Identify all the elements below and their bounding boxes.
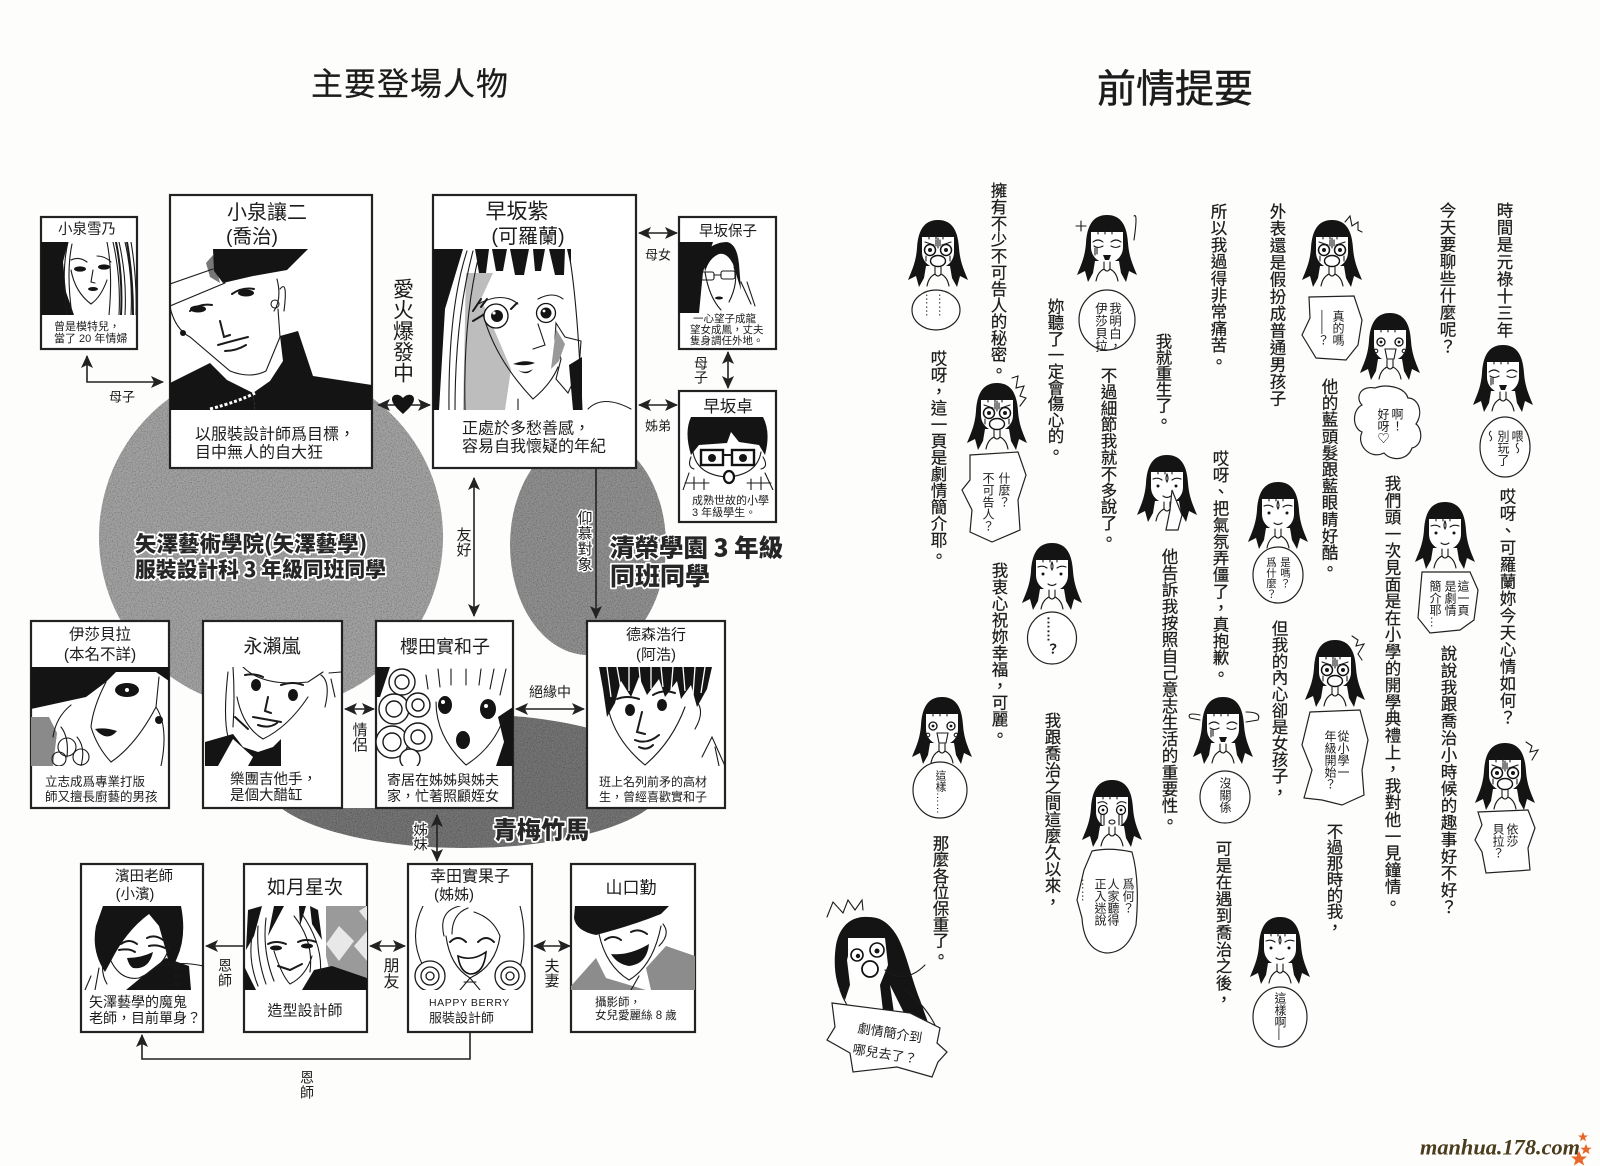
story text columns: 妳聽了一定會傷心的。 — [1045, 298, 1064, 460]
panel: Suguru Hayasaka — [679, 391, 776, 522]
title: story so far: 前情提要 — [1097, 68, 1253, 112]
caption — [692, 493, 769, 519]
bubble text: 我明白， — [1107, 302, 1121, 352]
name: 櫻田實和子 — [400, 637, 490, 657]
caption — [45, 774, 158, 804]
relation label: 母子 — [693, 356, 709, 384]
bubble text: 別玩了 — [1496, 430, 1510, 466]
caption: 正處於多愁善感， — [462, 418, 590, 438]
relation label: 夫妻 — [542, 958, 560, 988]
chibi: happy girl with cloud bubble — [1354, 313, 1421, 459]
name: 小泉雪乃 — [58, 221, 116, 238]
icon: stars — [1571, 1132, 1592, 1166]
relation label: 恩師 — [299, 1070, 315, 1100]
long hair — [835, 917, 930, 1028]
chibi: puzzled girl — [1022, 543, 1082, 664]
bubble text: 爲何？ — [1121, 878, 1135, 914]
bubble text: 不可告人？ — [981, 472, 995, 532]
story text columns: 哎呀，這一頁是劇情簡介耶。 — [928, 350, 947, 564]
story text columns: 但我的內心卻是女孩子， — [1269, 620, 1288, 800]
name: 山口勤 — [606, 878, 656, 898]
arrow: mentor (Kisaragi to Hamada) — [206, 946, 244, 988]
chibi: what? — [962, 376, 1027, 542]
arrow: friends (Kisaragi and Mikako) — [370, 946, 405, 989]
caption — [595, 995, 677, 1022]
bubble text — [1376, 408, 1404, 444]
bubble text: 喂～ — [1510, 430, 1524, 454]
relation: love in bloom: 愛火爆發中 — [390, 278, 414, 383]
bubble text: …… — [936, 293, 950, 317]
relation label: 情侶 — [350, 722, 368, 752]
story text columns: 可是在遇到喬治之後， — [1213, 840, 1232, 1008]
bubble text: 依莎 — [1505, 822, 1519, 847]
nickname: (本名不詳) — [64, 646, 136, 664]
caption: 矢澤藝學的魔鬼 — [89, 994, 187, 1010]
bubble — [1253, 987, 1307, 1047]
bubble — [1480, 417, 1530, 477]
title: main characters: 主要登場人物 — [311, 66, 509, 102]
bubble — [1253, 547, 1303, 603]
caption: 老師，目前單身？ — [89, 1010, 201, 1026]
dark ellipse: childhood friends — [282, 716, 648, 848]
name: 幸田實果子 — [430, 866, 510, 886]
circle label: Seiei classmates: 同班同學 — [610, 557, 710, 593]
caption: 服裝設計師 — [429, 1010, 494, 1026]
bubble text: 人家聽得 — [1106, 878, 1120, 926]
relation label: 姊弟 — [645, 418, 671, 434]
name: 早坂紫 — [486, 200, 548, 224]
bubble text: 好呀♡ — [1376, 408, 1390, 444]
arrow: friends — [454, 478, 474, 616]
chibi: sweating, silent — [908, 220, 968, 330]
bubble — [1475, 810, 1535, 873]
story text columns — [928, 182, 1516, 1008]
bubble text — [1079, 878, 1135, 927]
bubble text — [1428, 579, 1470, 628]
bubble text — [1483, 430, 1524, 466]
arrow: mother and daughter — [639, 233, 677, 262]
bubble text — [923, 293, 950, 317]
caption: 寄居在姊姊與姊夫 — [387, 772, 499, 788]
bubble text: 是劇情 — [1443, 580, 1457, 617]
story text columns: 哎呀、把氣氛弄僵了，真抱歉。 — [1210, 450, 1229, 682]
caption: 以服裝設計師爲目標， — [195, 426, 355, 444]
circle label: Yazawa Art classmates: 矢澤藝術學院(矢澤藝學) — [135, 528, 367, 558]
caption: 曾是模特兒， — [54, 319, 120, 333]
name: 早坂卓 — [703, 397, 753, 416]
bubble text: 爲什麼？ — [1265, 557, 1277, 599]
arrow with heart — [378, 404, 430, 406]
chibi: teasing girl with bubble — [1473, 345, 1533, 477]
caption: 隻身調任外地。 — [690, 334, 764, 347]
chibi: I understand, Isabella — [1076, 215, 1137, 352]
chibi: Isabella? — [1475, 742, 1538, 873]
chibi: this page is a synopsis — [1415, 502, 1478, 633]
relation: love in bloom — [378, 278, 430, 414]
story text columns: 說說我跟喬治小時候的趣事好不好？ — [1438, 645, 1457, 915]
arrow: mother and son (Hayasaka) — [693, 352, 728, 388]
bubble — [912, 290, 960, 330]
story text columns: 我們頭一次見面是在小學的開學典禮上，我對他一見鐘情。 — [1382, 475, 1401, 912]
caption: 造型設計師 — [267, 1002, 343, 1020]
bubble — [1028, 612, 1076, 664]
bubble text — [1491, 822, 1519, 859]
bubble — [1200, 771, 1250, 823]
bubble text — [981, 472, 1011, 532]
sign text: 哪兒去了？ — [852, 1042, 918, 1066]
bubble text: ……？ — [1044, 616, 1060, 655]
relation label: 絕緣中 — [529, 684, 571, 700]
bubble text: 簡介耶… — [1428, 579, 1442, 628]
nickname: (小濱) — [116, 886, 154, 903]
portrait — [679, 242, 756, 313]
story text columns: 哎呀、可羅蘭妳今天心情如何？ — [1497, 488, 1516, 726]
bubble text: 真的嗎 — [1331, 310, 1345, 347]
caption: 一心望子成龍 — [693, 312, 756, 325]
panel: Yukino Koizumi — [41, 217, 137, 349]
bubble — [1418, 572, 1478, 633]
name: 德森浩行 — [626, 626, 686, 644]
chibi: shouting girl with sign — [827, 900, 947, 1077]
portrait — [31, 667, 169, 766]
nickname: (姊姊) — [434, 886, 474, 904]
gray circle: Yazawa Art classmates — [99, 365, 443, 709]
chibi: I see — [1250, 917, 1310, 1047]
bubble — [1302, 710, 1368, 805]
panel: Joji Koizumi — [170, 195, 372, 468]
circle label: Yazawa Art classmates: 服裝設計科 3 年級同班同學 — [135, 553, 386, 583]
bubble text: 貝拉？ — [1491, 823, 1505, 859]
circle label: Yazawa Art classmates — [135, 528, 386, 583]
caption — [54, 319, 127, 345]
circle label: Seiei classmates — [610, 530, 783, 593]
bubble — [1302, 296, 1362, 360]
caption: HAPPY BERRY — [429, 997, 510, 1009]
bubble text: 這樣啊— — [1273, 991, 1287, 1040]
sign — [827, 1003, 947, 1077]
nickname: (可羅蘭) — [491, 225, 565, 248]
panel: Arashi Nagase — [203, 621, 342, 808]
chibi: crying, why — [1077, 780, 1142, 953]
caption: 生，曾經喜歡實和子 — [599, 789, 707, 804]
story text columns: 那麼各位保重了。 — [930, 835, 949, 965]
stray strands — [840, 965, 935, 1025]
panel: Tsutomu Yamaguchi — [571, 864, 695, 1032]
bubble text: …… — [923, 293, 937, 317]
story text columns: 時間是元祿十三年 — [1494, 202, 1513, 339]
relation label: 母女 — [645, 248, 671, 262]
arrow: sisters — [411, 815, 437, 861]
caption: 班上名列前矛的高材 — [599, 774, 707, 789]
portrait — [571, 906, 695, 990]
name: 如月星次 — [267, 876, 343, 898]
bubble text: ——？ — [1316, 310, 1330, 346]
bubble text — [1265, 557, 1291, 599]
story text columns: 我跟喬治之間這麼久以來， — [1042, 712, 1061, 910]
sign text: 劇情簡介到 — [857, 1021, 923, 1045]
nickname: (喬治) — [226, 226, 278, 248]
portrait — [599, 667, 724, 766]
chibi: so it is — [912, 697, 972, 818]
sign text — [852, 1021, 923, 1066]
name: 早坂保子 — [699, 223, 757, 240]
story text columns: 外表還是假扮成普通男孩子 — [1267, 203, 1286, 407]
bubble text: 正入迷說 — [1093, 878, 1107, 927]
bubble text: 這樣…… — [934, 769, 946, 814]
portrait — [682, 417, 774, 490]
name: 永瀨嵐 — [243, 636, 301, 658]
portrait — [244, 906, 367, 990]
panel: Mikako Koda — [408, 864, 532, 1032]
arrow: lovers — [345, 709, 374, 752]
cloud bubble — [1354, 386, 1421, 459]
bubble text: 這一頁 — [1456, 579, 1470, 617]
bubble — [1079, 290, 1135, 350]
story text columns: 我衷心祝妳幸福，可麗。 — [989, 562, 1008, 744]
arrow: spouses — [534, 946, 570, 988]
circle label: Seiei classmates: 清榮學園 3 年級 — [610, 530, 783, 564]
bubble text — [1323, 730, 1350, 790]
bubble text — [1093, 302, 1121, 352]
bubble text: 什麼？ — [997, 472, 1011, 508]
story text columns: 所以我過得非常痛苦。 — [1208, 203, 1227, 370]
relation label: 母子 — [109, 390, 135, 404]
story text columns: 他的藍頭髮跟藍眼睛好酷。 — [1319, 378, 1338, 577]
bubble text: …… — [1079, 878, 1093, 902]
relation label: 友好 — [454, 527, 472, 558]
bubble — [1077, 849, 1137, 953]
caption — [690, 312, 764, 347]
portrait — [414, 906, 526, 990]
panel: Miwako Sakurada — [376, 621, 513, 808]
portrait — [170, 249, 372, 410]
bubble text: 從小學一 — [1336, 730, 1350, 778]
arrow: mother and son — [87, 356, 163, 404]
gray circle: Seiei classmates — [510, 435, 666, 655]
panel: Isabella — [31, 621, 169, 808]
caption: 望女成鳳，丈夫 — [690, 323, 764, 336]
caption: 樂團吉他手， — [230, 771, 317, 788]
caption: 師又擅長廚藝的男孩 — [45, 789, 158, 804]
story text columns: 不過細節我就不多說了。 — [1098, 367, 1117, 547]
portrait — [84, 906, 203, 990]
caption — [230, 771, 317, 804]
portrait — [205, 667, 341, 766]
story text columns: 擁有不少不可告人的秘密。 — [988, 182, 1007, 379]
arrow: broken up — [516, 684, 584, 709]
caption: 容易自我懷疑的年紀 — [462, 438, 606, 456]
face — [848, 938, 884, 980]
chibi: startled girl "really?" — [1302, 216, 1362, 360]
story text columns: 他告訴我按照自己意志生活的重要性。 — [1159, 548, 1178, 830]
icon: heart — [392, 395, 414, 414]
bubble — [913, 762, 967, 818]
caption: 目中無人的自大狂 — [195, 444, 323, 462]
caption — [429, 997, 510, 1026]
caption: 是個大醋缸 — [230, 786, 302, 804]
relation label: 朋友 — [380, 957, 400, 989]
nickname: (阿浩) — [636, 646, 676, 664]
caption: 立志成爲專業打版 — [45, 774, 146, 789]
arrow: sister and brother — [639, 405, 677, 434]
story text columns: 今天要聊些什麼呢？ — [1437, 202, 1456, 355]
portrait — [41, 242, 136, 315]
caption: 家，忙著照顧姪女 — [387, 788, 499, 804]
bubble text: 是嗎？ — [1279, 557, 1291, 588]
relation label: 恩師 — [217, 958, 233, 988]
relation label: 仰慕對象 — [576, 510, 592, 572]
bubble text — [1316, 310, 1345, 347]
panel: Yasuko Hayasaka — [679, 217, 776, 349]
caption: 當了 20 年情婦 — [54, 331, 127, 345]
arrow: mentor (Mikako to Hamada) — [142, 1032, 470, 1100]
name: 伊莎貝拉 — [69, 626, 131, 644]
circle label: childhood friends: 青梅竹馬 — [493, 810, 589, 846]
caption — [195, 426, 355, 462]
chibi: crying, it's okay — [1189, 697, 1259, 823]
name: 濱田老師 — [115, 868, 173, 885]
watermark — [1420, 1132, 1592, 1166]
caption — [462, 418, 606, 456]
bubble text: 伊莎貝拉 — [1093, 302, 1107, 352]
caption: 攝影師， — [595, 995, 641, 1009]
caption: 3 年級學生。 — [692, 505, 756, 519]
shock crown — [827, 900, 863, 917]
bubble text: 啊！ — [1390, 408, 1404, 432]
portrait — [433, 249, 632, 410]
panel: Yukari Hayasaka — [433, 195, 636, 468]
panel: Hiroyuki Tokumori — [587, 621, 725, 808]
watermark: manhua.178.com — [1420, 1134, 1580, 1160]
bubble text: 沒關係 — [1218, 777, 1232, 813]
portrait — [376, 667, 513, 766]
caption: 女兒愛麗絲 8 歲 — [595, 1008, 677, 1022]
caption — [387, 772, 499, 804]
bubble — [962, 452, 1026, 542]
chibi: asking why — [1248, 482, 1308, 603]
relation label: 姊妹 — [411, 822, 427, 851]
bubble text: 年級開始？ — [1323, 730, 1337, 790]
name: 小泉讓二 — [227, 201, 307, 224]
panel: Hamada sensei — [81, 864, 203, 1032]
chibi: praying girl — [1137, 455, 1197, 530]
story text columns: 不過那時的我， — [1324, 823, 1343, 935]
bubble text: ～ — [1483, 430, 1497, 442]
hands — [1166, 490, 1182, 530]
chibi: since first grade — [1302, 636, 1368, 805]
caption — [599, 774, 707, 804]
story text columns: 我就重生了。 — [1153, 333, 1172, 429]
panel: Seiji Kisaragi — [244, 864, 367, 1032]
caption — [89, 994, 201, 1026]
caption: 成熟世故的小學 — [692, 493, 769, 507]
